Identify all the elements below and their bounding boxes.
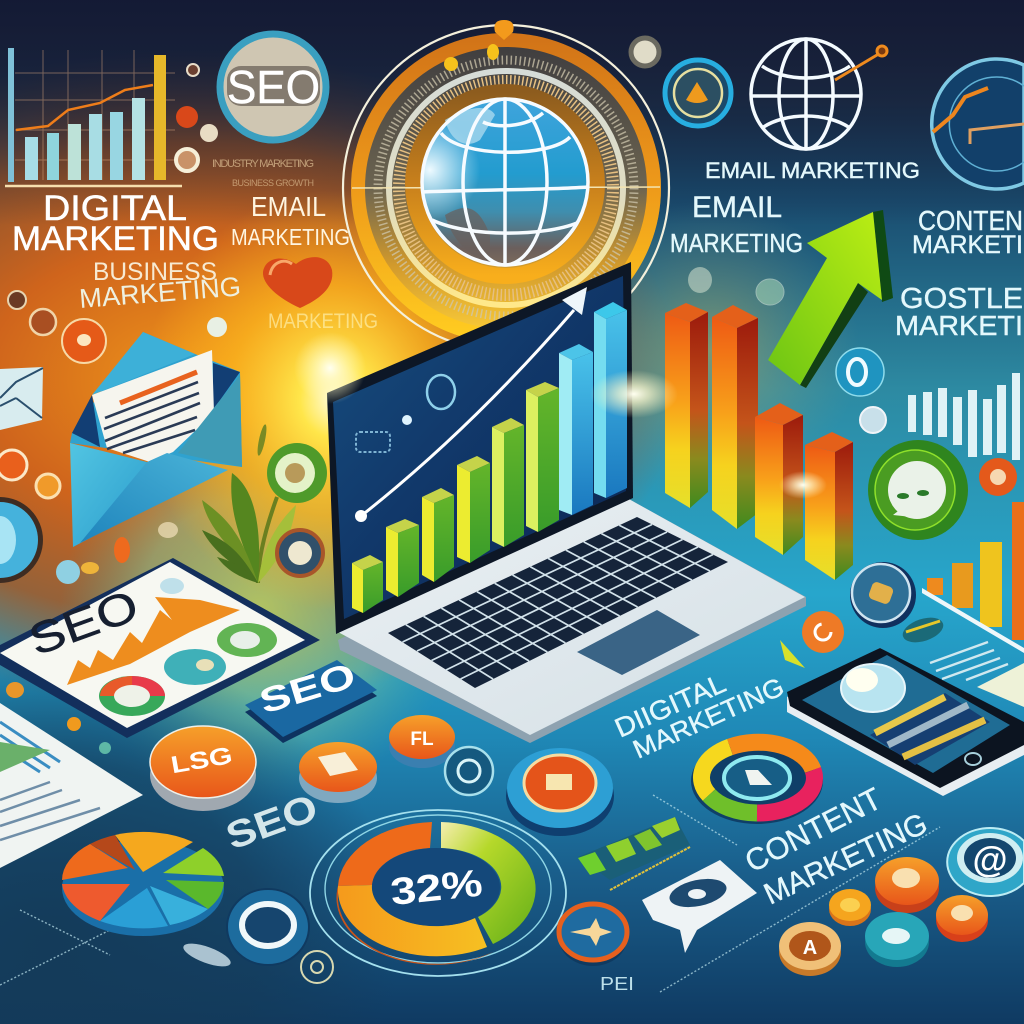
trackpad <box>577 610 700 675</box>
heading: Digital Marketing <box>12 189 219 258</box>
text: Email Marketing left <box>231 191 350 250</box>
icons: faint circles near bars <box>688 267 784 305</box>
chart: small white bars right <box>908 373 1020 460</box>
icons: bottom right buttons <box>779 857 988 976</box>
icon: globe <box>422 99 588 265</box>
icon: small grey ring <box>631 38 659 66</box>
bar 1 <box>352 555 383 613</box>
icon: FL button <box>389 715 455 768</box>
icon: orange pointer on globe <box>835 46 887 80</box>
text: Email Marketing left: EMAIL <box>251 191 326 222</box>
icon: orange C circle <box>802 611 844 653</box>
heading: Digital Marketing: DIGITAL <box>43 189 187 228</box>
bar 3 <box>422 488 454 582</box>
globe rings <box>343 20 669 351</box>
text: small garbled caption <box>212 158 314 188</box>
icon: white chat bubble <box>642 860 757 953</box>
icon: blue ring button <box>506 748 614 836</box>
screen icons <box>356 375 455 452</box>
chart: top-left bar chart <box>5 48 182 186</box>
icon: pale bubble <box>860 407 886 433</box>
icon: blue lock circle <box>850 562 916 628</box>
text: PEI label: PEI <box>600 974 634 994</box>
text: Content Marketing lower: CONTENT <box>739 781 887 879</box>
icon: SEO badge circle <box>220 34 326 140</box>
text: Digital Marketing lower: DIIGITAL <box>610 668 730 743</box>
icon: orange blob ring <box>665 60 731 126</box>
decorative dotted lines <box>0 795 940 992</box>
icon: left edge blue disc <box>0 497 43 583</box>
icon: green chat circle <box>868 440 968 540</box>
chart: 3D orange and yellow bars <box>665 303 853 580</box>
text: Business Marketing: BUSINESS <box>93 258 217 286</box>
laptop base <box>338 498 806 743</box>
chart: donut with 32% <box>310 810 566 976</box>
icons: small left icons <box>0 291 227 584</box>
panel: SEO report card <box>0 558 320 738</box>
text: Email Marketing right: MARKETING <box>670 228 803 258</box>
icons: small icons beside chart <box>176 64 218 171</box>
icon: orange circle right <box>979 458 1017 496</box>
text: Content Marketing top right: GOSTLE <box>900 283 1023 315</box>
badge: SEO button <box>245 656 377 743</box>
bar 6 <box>526 382 559 532</box>
bar 5 <box>492 418 524 547</box>
text: Content Marketing top right <box>895 205 1023 341</box>
chart: orange bars on right tablet <box>922 502 1024 707</box>
bar 4 <box>457 456 490 563</box>
icon: small envelope at left edge <box>0 367 43 430</box>
text: Email Marketing right <box>670 158 920 258</box>
icon: LSG button <box>150 726 256 811</box>
icon: wireframe globe right <box>751 39 861 149</box>
heading: Digital Marketing: MARKETING <box>12 220 219 258</box>
icon: blue circle button lower left <box>227 889 309 965</box>
light flares <box>294 332 827 499</box>
icon: top-right analytics circle <box>932 59 1024 189</box>
icon: at sign circle: @ <box>972 839 1008 880</box>
bar 8 <box>594 302 627 498</box>
document page <box>92 350 214 462</box>
arrow: large green up arrow <box>768 210 893 388</box>
text: small garbled caption: INDUSTRY MARKETING <box>212 158 314 170</box>
icon: plant <box>202 424 296 583</box>
text: faint marketing label: MARKETING <box>268 310 378 333</box>
icon: LSG button: LSG <box>169 742 235 779</box>
chart: donut with 32%: 32% <box>389 863 484 914</box>
text: small garbled caption: BUSINESS GROWTH <box>232 178 314 188</box>
icon: green badge on plant <box>267 443 327 503</box>
laptop <box>327 262 806 743</box>
keyboard <box>388 517 728 688</box>
chart: multi-colour ring <box>691 738 823 824</box>
icon: large open envelope with document <box>70 332 242 547</box>
icon: orange dot markers <box>6 682 111 754</box>
text: Business Marketing: MARKETING <box>78 271 242 314</box>
panel: left-bottom report page <box>0 703 143 868</box>
icon: blue O circle <box>836 348 884 396</box>
icon: SEO badge circle: SEO <box>227 61 320 113</box>
text: SEO faint: SEO <box>221 787 323 858</box>
badge: SEO button: SEO <box>255 656 360 722</box>
icon: stripe pill <box>900 613 946 647</box>
icon: phone / tablet <box>787 648 1024 796</box>
panel: SEO report card: SEO <box>23 581 145 665</box>
text: Content Marketing lower: MARKETING <box>759 807 932 911</box>
text: Digital Marketing lower: MARKETING <box>628 671 788 764</box>
text: Email Marketing left: MARKETING <box>231 224 350 250</box>
laptop screen <box>327 262 633 634</box>
chart: laptop bar chart <box>352 302 627 613</box>
icon: ring button <box>445 747 493 795</box>
icons: bottom right buttons: A <box>803 937 817 959</box>
icon: small olive ring <box>301 951 333 983</box>
icon: yellow sparkle <box>780 640 805 668</box>
bar 7 <box>559 344 593 515</box>
icon: pale splash <box>181 939 233 971</box>
icon: small multicolour badge <box>277 530 323 576</box>
icon: FL button: FL <box>410 729 434 750</box>
bar 2 <box>386 519 419 597</box>
icon: at sign circle <box>947 828 1024 896</box>
chart: small green bars panel <box>578 817 690 890</box>
icon: airplane button <box>559 904 627 966</box>
chart: pie chart <box>62 832 224 936</box>
text: Email Marketing right: EMAIL <box>692 191 782 224</box>
text: Content Marketing top right: MARKETI <box>895 310 1023 341</box>
icon: heart <box>263 257 332 308</box>
text: Email Marketing right: EMAIL MARKETING <box>705 158 920 183</box>
text: Content Marketing top right: MARKETI <box>912 231 1023 259</box>
arrow: white trend line on screen <box>355 287 587 522</box>
icon: small orange button <box>299 742 377 803</box>
